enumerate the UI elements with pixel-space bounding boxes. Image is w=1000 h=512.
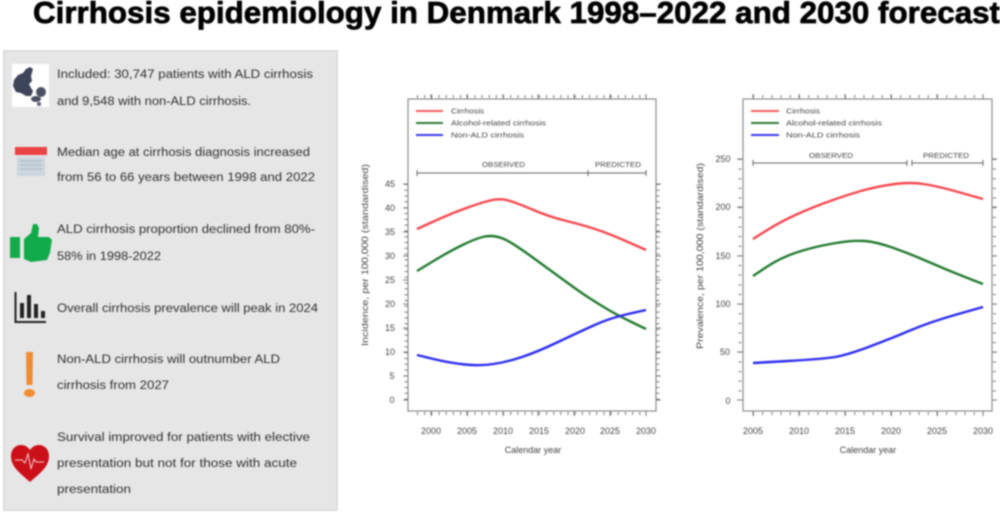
axis title: prevalence: Prevalence, per 100,000 (standardised) <box>695 163 705 349</box>
x tick labels: incidence <box>421 426 656 436</box>
x tick labels: prevalence: 2020 <box>881 426 901 436</box>
text: ALD proportion <box>57 224 315 263</box>
legend: incidence: Non-ALD cirrhosis <box>451 132 525 140</box>
text: prevalence peak: Overall cirrhosis prevalence will peak in 2024 <box>57 303 319 315</box>
text: median age <box>57 147 315 184</box>
y tick labels: prevalence: 100 <box>715 299 731 309</box>
text: non-ALD forecast: cirrhosis from 2027 <box>57 380 169 392</box>
legend: incidence <box>416 108 547 140</box>
axis title: calendar year: Calendar year <box>840 445 896 455</box>
text: survival: Survival improved for patients with elective <box>57 432 310 444</box>
legend: prevalence: Cirrhosis <box>786 108 821 116</box>
y tick labels: incidence <box>385 179 395 405</box>
text: ALD proportion: 58% in 1998-2022 <box>57 251 161 263</box>
period bar: observed and predicted: PREDICTED <box>595 162 641 169</box>
y tick labels: prevalence: 0 <box>725 396 731 406</box>
text: survival <box>57 432 310 496</box>
text: survival: presentation but not for those with acute <box>57 458 297 470</box>
line: non-ALD cirrhosis incidence <box>417 310 646 365</box>
line: cirrhosis incidence <box>417 199 646 250</box>
icon: thumbs up <box>10 224 52 262</box>
text: patients included: Included: 30,747 patients with ALD cirrhosis <box>57 69 313 81</box>
period bar: observed and predicted: OBSERVED <box>482 162 525 169</box>
y tick labels: incidence: 25 <box>385 275 395 285</box>
chart: incidence <box>360 94 661 455</box>
text: patients included <box>57 69 313 108</box>
icon: heart with pulse <box>11 445 49 482</box>
icon: exclamation mark <box>24 352 35 397</box>
legend: prevalence: Alcohol-related cirrhosis <box>786 120 883 128</box>
text: non-ALD forecast: Non-ALD cirrhosis will outnumber ALD <box>57 354 280 366</box>
x tick labels: prevalence: 2010 <box>789 426 809 436</box>
text: median age: from 56 to 66 years between 1998 and 2022 <box>57 172 315 184</box>
x tick labels: incidence: 2015 <box>529 426 549 436</box>
x tick labels: incidence: 2010 <box>493 426 513 436</box>
y tick labels: prevalence: 50 <box>720 347 730 357</box>
axis title: incidence: Incidence, per 100,000 (standardised) <box>360 164 370 346</box>
text: median age: Median age at cirrhosis diagnosis increased <box>57 147 310 159</box>
panel: key findings <box>3 50 338 511</box>
y tick labels: incidence: 0 <box>389 395 395 405</box>
y tick labels: incidence: 15 <box>385 323 395 333</box>
text: patients included: and 9,548 with non-ALD cirrhosis. <box>57 96 251 108</box>
x tick labels: incidence: 2000 <box>421 426 441 436</box>
x tick labels: incidence: 2030 <box>636 426 656 436</box>
y tick labels: incidence: 20 <box>385 299 395 309</box>
y tick labels: prevalence: 200 <box>715 202 731 212</box>
axis ticks: incidence <box>403 94 661 416</box>
y tick labels: prevalence: 250 <box>715 154 731 164</box>
icon: Denmark map <box>12 64 49 107</box>
period bar: observed and predicted <box>753 153 983 166</box>
icon: bar chart <box>16 292 46 322</box>
y tick labels: incidence: 30 <box>385 251 395 261</box>
text: ALD proportion: ALD cirrhosis proportion declined from 80%- <box>57 224 315 236</box>
x tick labels: incidence: 2005 <box>457 426 477 436</box>
line: alcohol-related cirrhosis prevalence <box>753 241 983 284</box>
y tick labels: prevalence: 150 <box>715 251 731 261</box>
x tick labels: prevalence: 2025 <box>927 426 947 436</box>
y tick labels: incidence: 40 <box>385 203 395 213</box>
x tick labels: prevalence: 2015 <box>835 426 855 436</box>
y tick labels: incidence: 35 <box>385 227 395 237</box>
period bar: observed and predicted: OBSERVED <box>809 153 853 160</box>
legend: incidence: Alcohol-related cirrhosis <box>451 120 547 128</box>
legend: prevalence: Non-ALD cirrhosis <box>786 132 861 140</box>
line: cirrhosis prevalence <box>753 183 983 239</box>
x tick labels: prevalence <box>743 426 993 436</box>
line: non-ALD cirrhosis prevalence <box>753 307 983 363</box>
legend: incidence: Cirrhosis <box>451 108 485 116</box>
y tick labels: incidence: 5 <box>389 371 395 381</box>
x tick labels: prevalence: 2030 <box>973 426 993 436</box>
x tick labels: prevalence: 2005 <box>743 426 763 436</box>
line: alcohol-related cirrhosis incidence <box>417 236 646 329</box>
axis ticks: prevalence <box>737 94 997 416</box>
text: non-ALD forecast <box>57 354 280 392</box>
x tick labels: incidence: 2025 <box>600 426 620 436</box>
y tick labels: incidence: 10 <box>385 347 395 357</box>
y tick labels: prevalence <box>715 154 731 406</box>
period bar: observed and predicted: PREDICTED <box>923 153 969 160</box>
x tick labels: incidence: 2020 <box>565 426 585 436</box>
period bar: observed and predicted <box>417 162 646 176</box>
axis title: calendar year: Calendar year <box>505 445 561 455</box>
y tick labels: incidence: 45 <box>385 179 395 189</box>
legend: prevalence <box>751 108 883 140</box>
text: survival: presentation <box>57 484 131 496</box>
chart: prevalence <box>695 94 997 455</box>
icon: calendar <box>15 147 47 176</box>
